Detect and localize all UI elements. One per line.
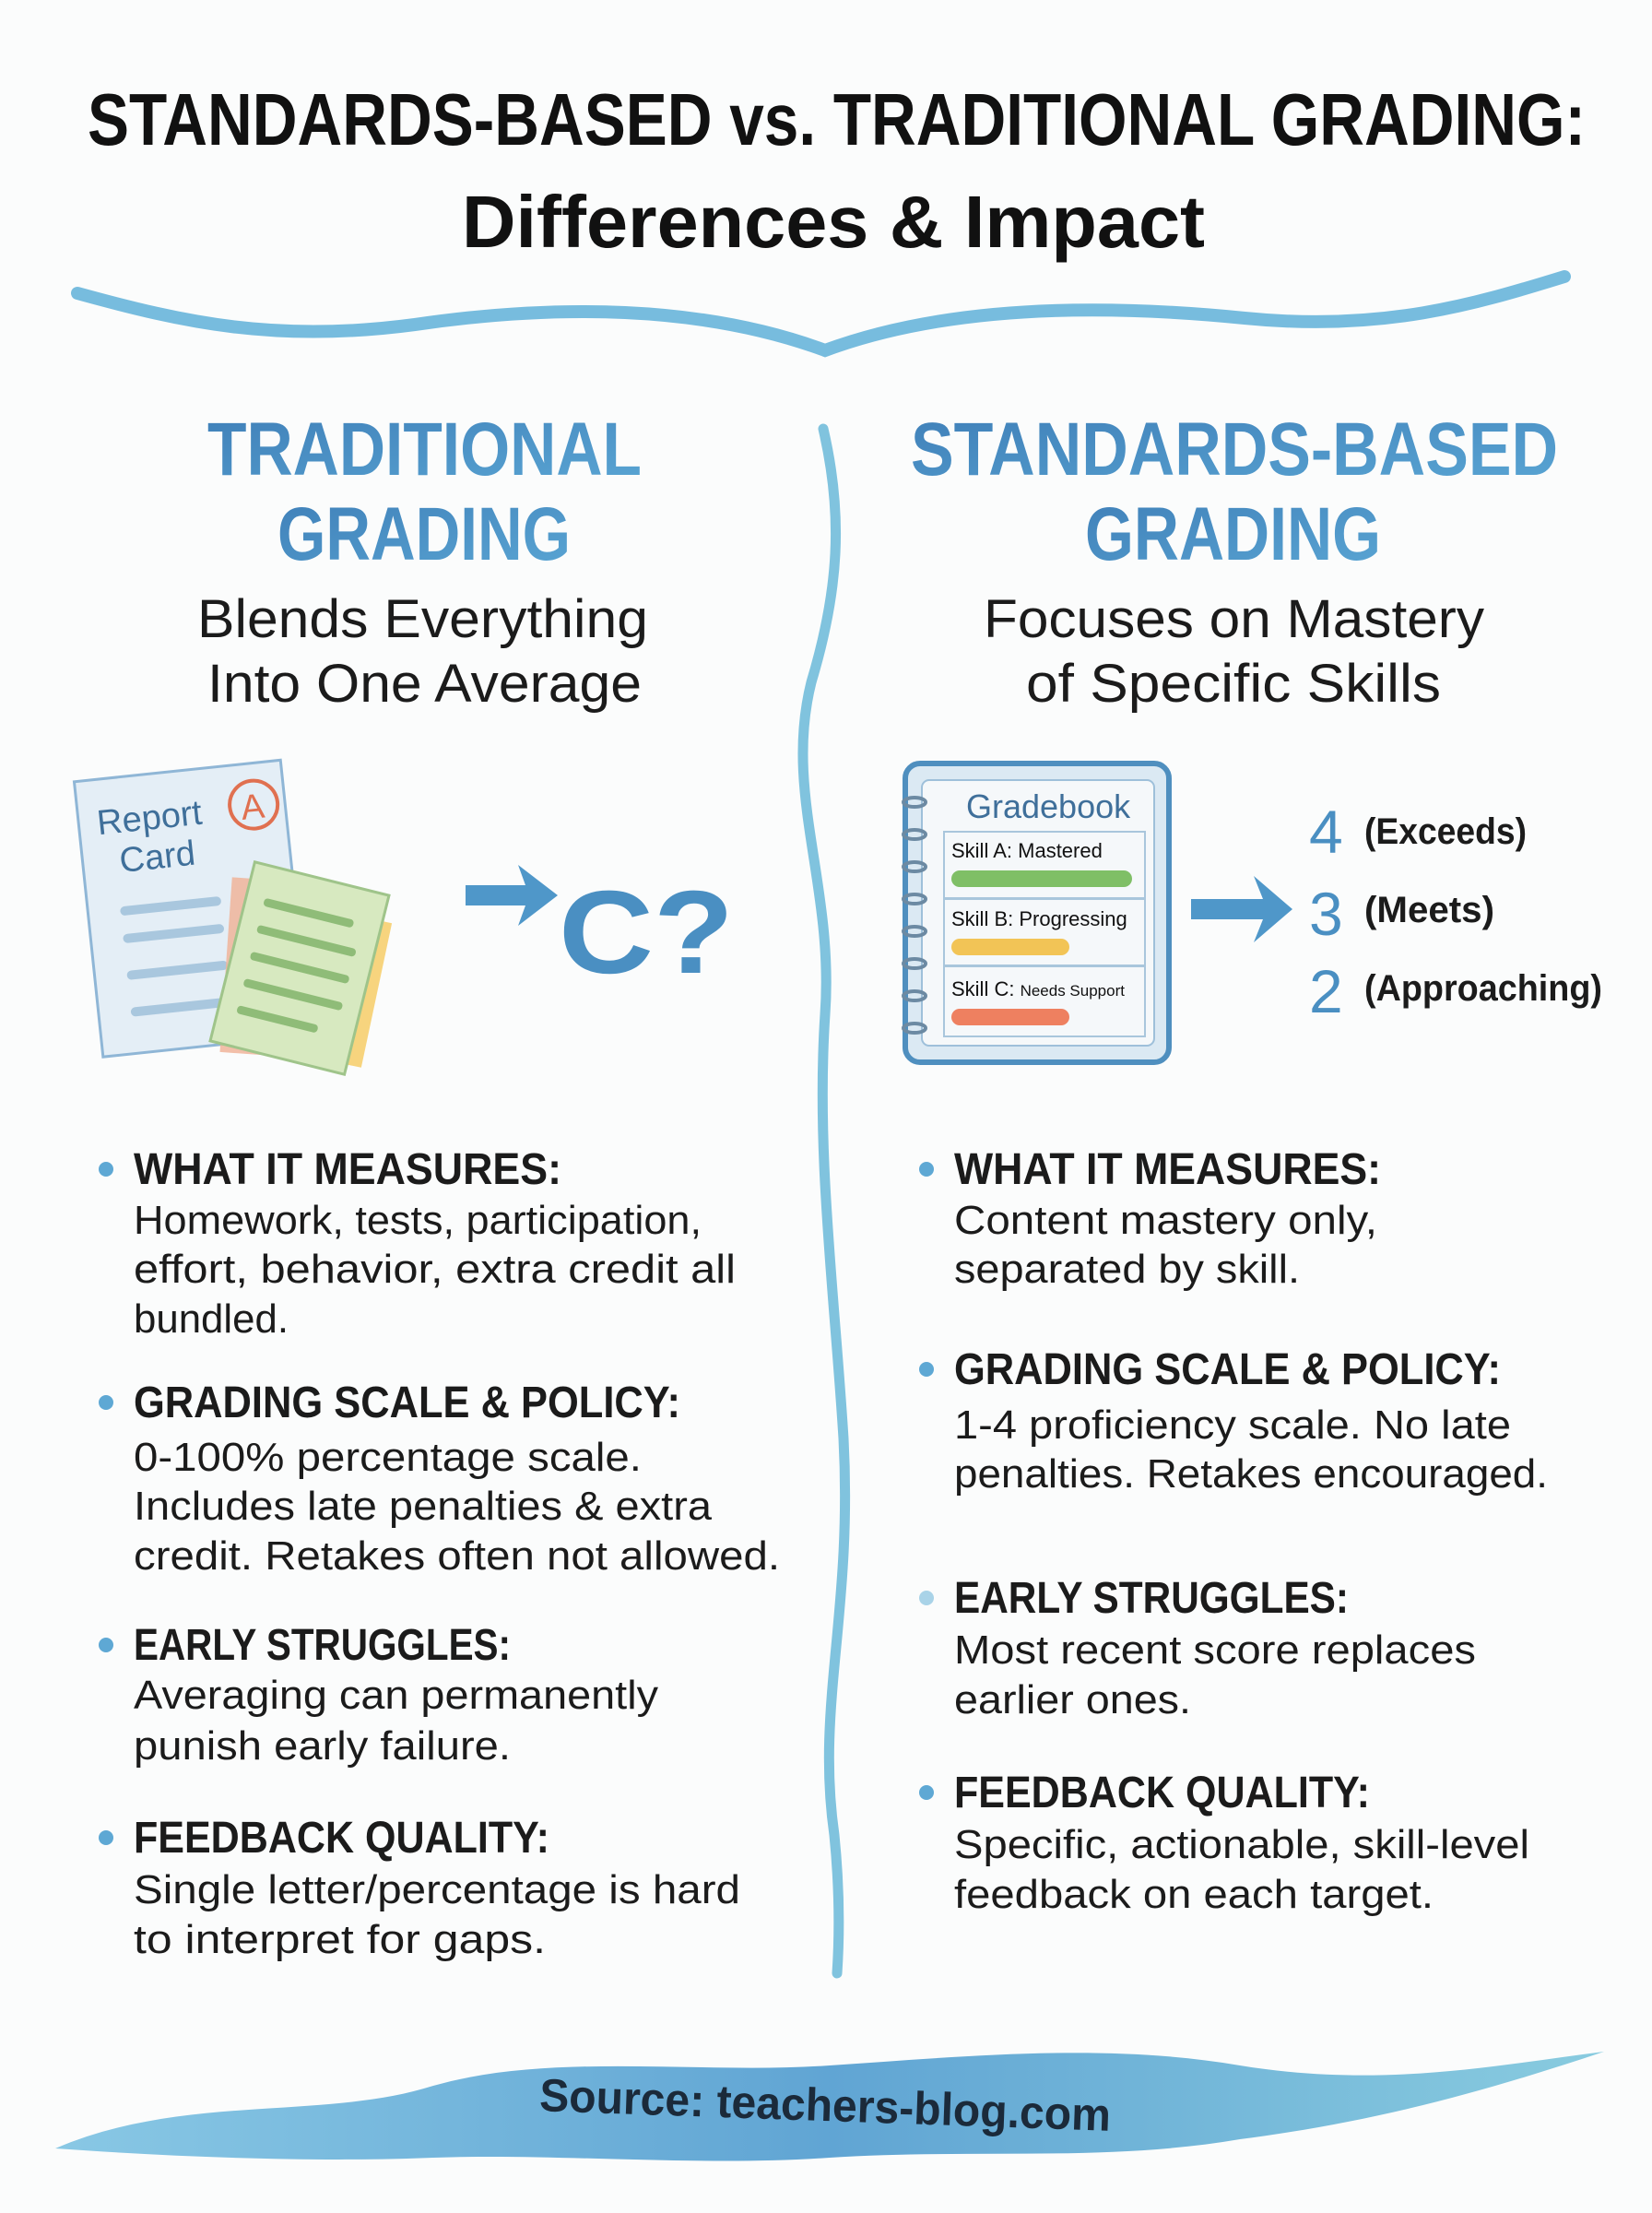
right heading: standards-based grading: of Specific Skills — [1026, 654, 1441, 714]
left bullets: FEEDBACK QUALITY: — [134, 1814, 549, 1863]
icon: report card with papers: A — [239, 787, 267, 828]
right bullets: earlier ones. — [954, 1677, 1191, 1722]
right bullets: penalties. Retakes encouraged. — [954, 1451, 1548, 1497]
left heading: traditional grading: Blends Everything — [197, 589, 648, 649]
wave divider top — [77, 277, 1564, 350]
right bullets: EARLY STRUGGLES: — [954, 1574, 1349, 1623]
proficiency scale: 4 — [1309, 798, 1343, 866]
left bullets: punish early failure. — [134, 1723, 511, 1769]
left bullets: 0-100% percentage scale. — [134, 1435, 642, 1480]
right heading: standards-based grading — [911, 408, 1558, 714]
left bullets: Single letter/percentage is hard — [134, 1867, 740, 1912]
right bullets: feedback on each target. — [954, 1872, 1434, 1917]
left bullets: bundled. — [134, 1296, 289, 1342]
right bullets: GRADING SCALE & POLICY: — [954, 1345, 1501, 1394]
right bullets: Most recent score replaces — [954, 1627, 1476, 1673]
right heading: standards-based grading: GRADING — [1085, 492, 1381, 576]
right bullets — [919, 1145, 1548, 1917]
icon: gradebook: Skill A: Mastered — [951, 839, 1103, 862]
arrow left — [466, 865, 558, 926]
proficiency scale: 3 — [1309, 880, 1343, 948]
right bullets: Content mastery only, — [954, 1198, 1377, 1243]
left bullets: credit. Retakes often not allowed. — [134, 1533, 780, 1579]
left heading: traditional grading: GRADING — [277, 492, 571, 576]
title: Differences & Impact — [462, 181, 1205, 263]
icon: gradebook: Skill B: Progressing — [951, 907, 1127, 930]
arrow right — [1191, 876, 1292, 942]
proficiency scale — [1309, 798, 1602, 1025]
right bullets: separated by skill. — [954, 1247, 1300, 1292]
icon: report card with papers: Card — [118, 834, 197, 881]
source banner — [55, 2052, 1604, 2161]
icon: report card with papers: Report — [95, 794, 204, 843]
left bullets: WHAT IT MEASURES: — [134, 1145, 561, 1194]
left bullets: Averaging can permanently — [134, 1673, 658, 1718]
left bullets: EARLY STRUGGLES: — [134, 1621, 511, 1670]
right bullets: WHAT IT MEASURES: — [954, 1145, 1381, 1194]
proficiency scale: (Exceeds) — [1364, 811, 1527, 852]
right bullets: FEEDBACK QUALITY: — [954, 1769, 1370, 1817]
right heading: standards-based grading: Focuses on Mastery — [984, 589, 1484, 649]
proficiency scale: 2 — [1309, 957, 1343, 1025]
left bullets: to interpret for gaps. — [134, 1917, 546, 1962]
left bullets: Homework, tests, participation, — [134, 1198, 702, 1243]
left bullets: Includes late penalties & extra — [134, 1484, 713, 1529]
icon: gradebook: Gradebook — [966, 787, 1131, 825]
C? result: C? — [559, 867, 734, 999]
left bullets: effort, behavior, extra credit all — [134, 1247, 736, 1292]
left bullets — [99, 1145, 780, 1962]
source banner: Source: teachers-blog.com — [538, 2069, 1112, 2141]
icon: report card with papers — [74, 760, 392, 1074]
right heading: standards-based grading: STANDARDS-BASED — [911, 408, 1558, 491]
right bullets: Specific, actionable, skill-level — [954, 1822, 1529, 1867]
title — [88, 78, 1586, 263]
proficiency scale: (Approaching) — [1364, 968, 1602, 1009]
icon: gradebook: Skill C: Needs Support — [951, 977, 1125, 1000]
right bullets: 1-4 proficiency scale. No late — [954, 1402, 1511, 1448]
left heading: traditional grading — [197, 408, 648, 714]
left heading: traditional grading: TRADITIONAL — [207, 408, 642, 491]
proficiency scale: (Meets) — [1364, 890, 1494, 930]
left heading: traditional grading: Into One Average — [207, 654, 642, 714]
left bullets: GRADING SCALE & POLICY: — [134, 1379, 680, 1427]
vertical divider — [803, 429, 845, 1973]
icon: gradebook — [903, 763, 1169, 1062]
